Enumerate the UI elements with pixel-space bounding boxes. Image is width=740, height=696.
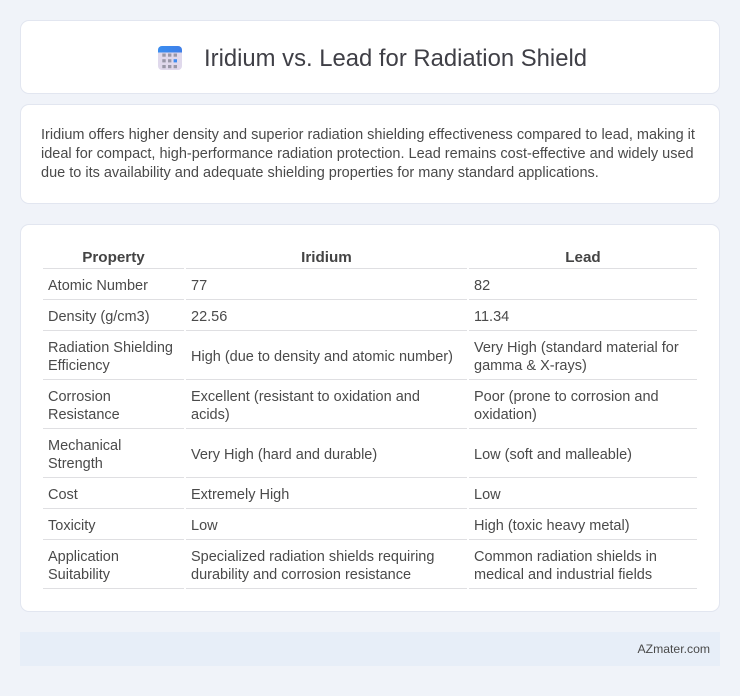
comparison table: Toxicity [48, 518, 96, 534]
summary text: ideal for compact, high-performance radiation protection. Lead remains cost-effective and widely used [41, 146, 694, 162]
comparison table: Strength [48, 456, 103, 472]
summary text [41, 127, 695, 181]
comparison table: acids) [191, 407, 230, 423]
comparison table: 82 [474, 278, 490, 294]
footer bar [20, 632, 720, 666]
comparison table: Very High (standard material for [474, 340, 679, 356]
comparison table: Specialized radiation shields requiring [191, 549, 434, 565]
comparison table [43, 249, 697, 589]
comparison table: High (due to density and atomic number) [191, 349, 453, 365]
comparison table: Corrosion [48, 389, 111, 405]
comparison table: Poor (prone to corrosion and [474, 389, 659, 405]
comparison table: Extremely High [191, 487, 289, 503]
comparison table: Property [82, 249, 145, 266]
comparison table: Density (g/cm3) [48, 309, 150, 325]
comparison table: Resistance [48, 407, 120, 423]
comparison table: Excellent (resistant to oxidation and [191, 389, 420, 405]
comparison table: Efficiency [48, 358, 110, 374]
summary text: due to its availability and adequate shielding properties for many standard applications. [41, 165, 599, 181]
comparison table: Atomic Number [48, 278, 148, 294]
comparison table: medical and industrial fields [474, 567, 652, 583]
comparison table: gamma & X-rays) [474, 358, 587, 374]
summary text: Iridium offers higher density and superior radiation shielding effectiveness compared to lead, making it [41, 127, 695, 143]
comparison table: Low [474, 487, 501, 503]
comparison table: 11.34 [474, 309, 509, 325]
comparison table: Mechanical [48, 438, 121, 454]
comparison table: Cost [48, 487, 78, 503]
comparison table: Low (soft and malleable) [474, 447, 632, 463]
comparison table: Lead [565, 249, 601, 266]
panel: title card [20, 20, 720, 94]
comparison table: Application [48, 549, 119, 565]
comparison table: 22.56 [191, 309, 227, 325]
comparison table: Very High (hard and durable) [191, 447, 377, 463]
comparison table: 77 [191, 278, 207, 294]
icon: calendar [158, 46, 182, 70]
comparison table: oxidation) [474, 407, 537, 423]
footer credit: AZmater.com [638, 642, 710, 656]
comparison table: Suitability [48, 567, 110, 583]
comparison table: durability and corrosion resistance [191, 567, 411, 583]
panel: summary [20, 104, 720, 204]
comparison table: Radiation Shielding [48, 340, 173, 356]
comparison table: Low [191, 518, 218, 534]
comparison table: High (toxic heavy metal) [474, 518, 630, 534]
comparison table: Common radiation shields in [474, 549, 657, 565]
title: Iridium vs. Lead for Radiation Shield [204, 45, 587, 72]
panel: comparison table card [20, 224, 720, 612]
comparison table: Iridium [301, 249, 352, 266]
